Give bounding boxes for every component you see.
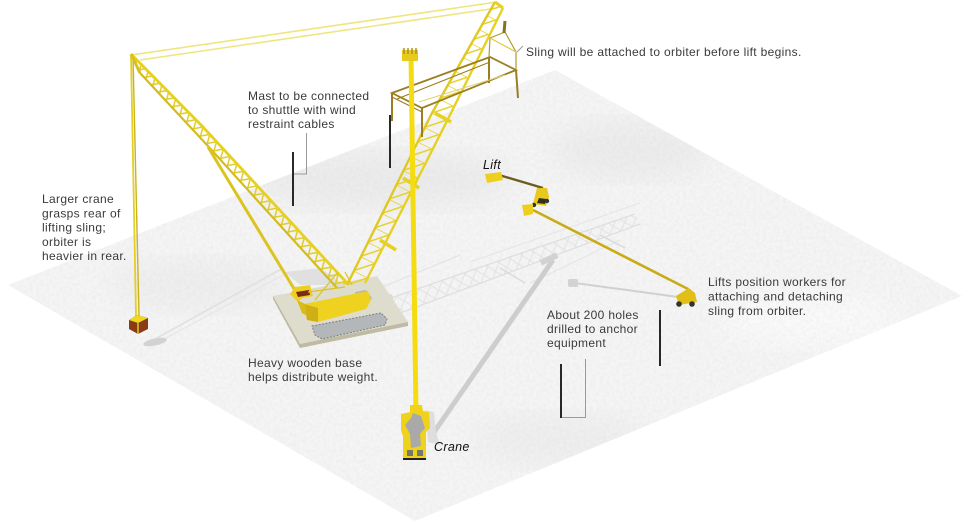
wooden base — [273, 276, 408, 348]
label: mast: Mast to be connected — [248, 89, 369, 103]
label: mast: restraint cables — [248, 117, 335, 131]
label: holes: About 200 holes — [547, 308, 639, 322]
label: larger crane: heavier in rear. — [42, 249, 127, 263]
large crane — [129, 54, 347, 334]
rear pendant and counterweight — [129, 55, 148, 334]
label: larger crane: lifting sling; — [42, 221, 106, 235]
tracks — [312, 290, 387, 339]
anchor poles and leader lines — [293, 46, 660, 418]
label: holes: equipment — [547, 336, 606, 350]
second boom — [347, 2, 503, 285]
mast — [401, 48, 430, 460]
upper lift — [485, 172, 549, 207]
label: holes: drilled to anchor — [547, 322, 638, 336]
mast base — [401, 405, 430, 460]
body — [304, 291, 371, 322]
label: larger crane: grasps rear of — [42, 206, 121, 220]
main boom — [131, 54, 347, 288]
label: larger crane: orbiter is — [42, 235, 91, 249]
label: wooden base: helps distribute weight. — [248, 370, 378, 384]
strut — [208, 147, 296, 292]
label: mast: to shuttle with wind — [248, 103, 356, 117]
cab — [290, 285, 313, 302]
pendant cables between crane tops — [131, 2, 497, 60]
mast top — [402, 48, 418, 61]
label: lifts: sling from orbiter. — [708, 304, 806, 318]
label: crane: Crane — [434, 440, 470, 454]
crane body on base — [290, 272, 387, 339]
label: lifts: Lifts position workers for — [708, 275, 846, 289]
lower lift — [522, 204, 697, 307]
label: lift: Lift — [483, 158, 501, 172]
label: sling: Sling will be attached to orbiter before lift begins. — [526, 45, 802, 59]
label: wooden base: Heavy wooden base — [248, 356, 362, 370]
shadows of cranes and lifts — [143, 203, 678, 445]
label: larger crane: Larger crane — [42, 192, 114, 206]
label: lifts: attaching and detaching — [708, 290, 843, 304]
orange frame and sling — [392, 21, 518, 137]
